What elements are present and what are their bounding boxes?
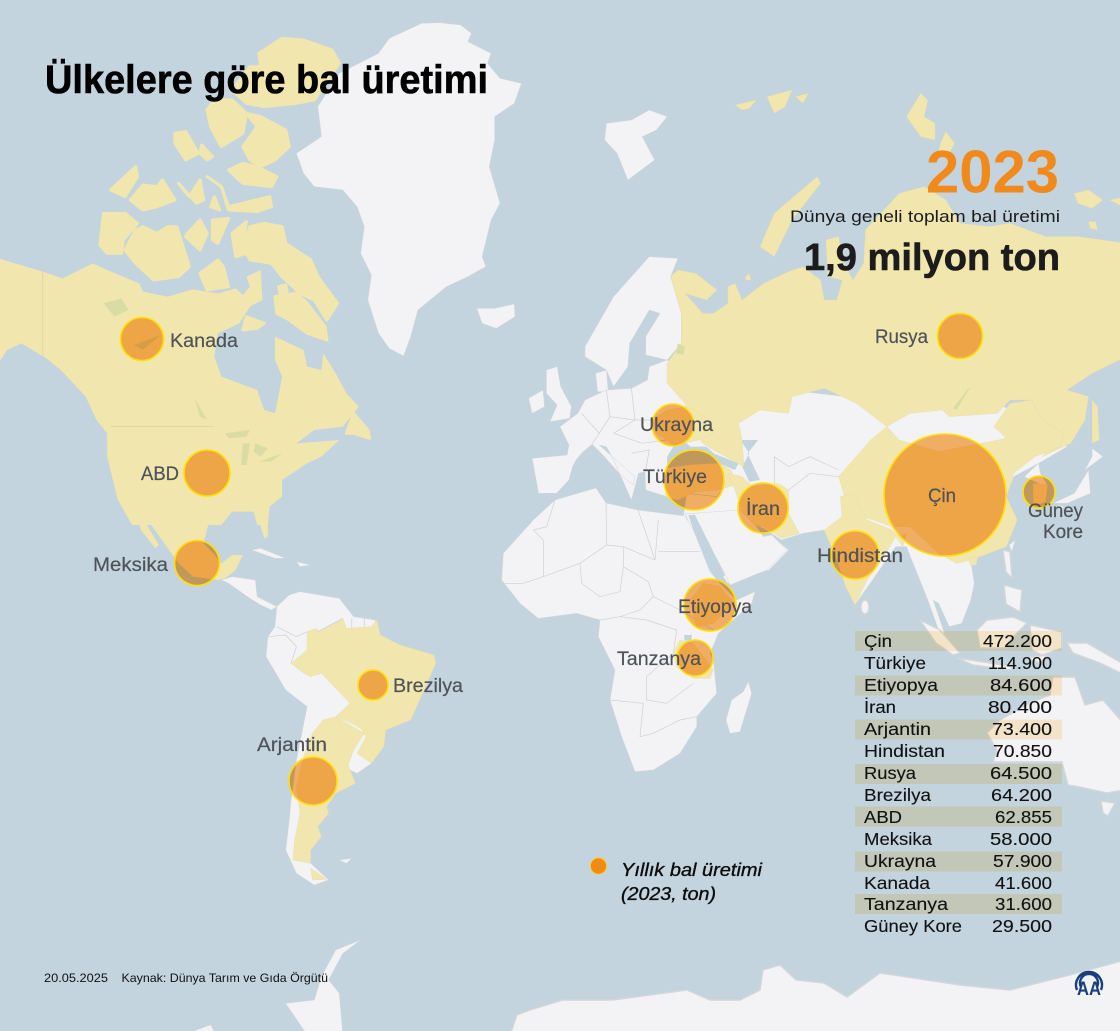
bubble: Etiyopya	[684, 579, 736, 631]
label: Tanzanya: Tanzanya	[617, 649, 701, 670]
land: Madagascar	[726, 682, 752, 733]
bubble: Arjantin	[289, 757, 337, 805]
label: Etiyopya: Etiyopya	[678, 597, 752, 618]
label: Ukrayna: Ukrayna	[640, 415, 713, 436]
land: Caribbean islands	[252, 548, 311, 567]
table values: 62.855	[995, 807, 1052, 827]
map: Southeast Asia and Oceania	[920, 550, 1120, 816]
land: Iceland	[477, 304, 515, 328]
land: Philippines	[1003, 550, 1022, 612]
table values	[983, 631, 1052, 936]
land: Central America	[221, 577, 277, 610]
water: Red Sea	[688, 515, 725, 578]
African borders	[503, 500, 713, 737]
borders: Alaska and USA-Canada	[43, 272, 214, 427]
table values: 57.900	[993, 851, 1052, 871]
table values: 80.400	[988, 697, 1052, 717]
table row stripes	[855, 631, 1062, 914]
bubble: Brezilya	[358, 670, 388, 700]
table values: 64.200	[991, 785, 1052, 805]
table values: 29.500	[992, 916, 1052, 936]
table country names: Türkiye	[864, 653, 926, 673]
land: Tanzania	[673, 640, 713, 678]
table values: 114.900	[988, 653, 1052, 673]
title: Ülkelere göre bal üretimi	[45, 57, 488, 102]
land: Korea	[1024, 463, 1047, 485]
water: Lake Victoria	[684, 635, 692, 641]
icon: AA logo	[1076, 972, 1102, 1000]
land: Borneo and Sulawesi	[977, 617, 1062, 655]
legend marker	[590, 858, 607, 874]
land: Sri Lanka	[861, 600, 869, 614]
table country names: Güney Kore	[864, 916, 962, 936]
year: 2023	[926, 138, 1059, 206]
land: Mexico and southern USA	[132, 515, 268, 580]
label: Meksika: Meksika	[93, 555, 168, 576]
South American borders	[268, 617, 364, 663]
land: Canadian Arctic islands	[100, 38, 370, 438]
table country names: Etiyopya	[864, 675, 938, 695]
land: Russian Arctic islands	[735, 90, 1120, 280]
table country names: Arjantin	[864, 719, 931, 739]
land: Japan	[1053, 448, 1103, 513]
land: British Isles	[529, 367, 571, 422]
land: Taiwan	[1009, 540, 1015, 552]
label: Türkiye: Türkiye	[643, 467, 707, 488]
legend text: (2023, ton)	[621, 884, 716, 904]
water: Black Sea	[667, 442, 739, 470]
bubble: Hindistan	[831, 531, 879, 579]
map: Africa	[502, 488, 787, 772]
label: ABD: ABD	[141, 464, 179, 485]
table values: 84.600	[990, 675, 1052, 695]
table country names: Brezilya	[864, 785, 931, 805]
land: Taimyr and northern Siberia	[865, 187, 1120, 333]
table country names: ABD	[864, 807, 902, 827]
land: Turkey	[665, 463, 735, 500]
label: Hindistan: Hindistan	[817, 546, 903, 567]
table country names: Ukrayna	[864, 851, 936, 871]
summary caption: Dünya geneli toplam bal üretimi	[790, 208, 1060, 226]
legend text: Yıllık bal üretimi	[621, 860, 763, 880]
table country names: Tanzanya	[864, 894, 948, 914]
global total: 1,9 milyon ton	[804, 237, 1060, 279]
label: İran: İran	[746, 499, 780, 520]
land: Antarctic peninsula	[182, 940, 564, 1031]
map: north atlantic and north america	[0, 23, 571, 525]
land: Sakhalin	[1092, 400, 1099, 443]
table values: 64.500	[990, 763, 1052, 783]
land: Argentina	[293, 717, 364, 880]
bubble: Rusya	[938, 314, 982, 358]
label: Kanada: Kanada	[170, 331, 238, 352]
table values: 472.200	[983, 631, 1052, 651]
land: Russia	[667, 187, 1120, 467]
table country names: Kanada	[864, 873, 930, 893]
table country names	[864, 631, 962, 936]
label: Brezilya: Brezilya	[393, 676, 463, 697]
lakes of North America	[104, 298, 282, 465]
bubble: Meksika	[174, 540, 220, 586]
label: Rusya: Rusya	[875, 327, 928, 348]
land: Hainan	[969, 557, 978, 565]
bubble: Tanzanya	[677, 640, 713, 676]
land: Ethiopia	[690, 583, 733, 627]
bubble: Güney Kore	[1023, 476, 1055, 508]
table values: 73.400	[992, 719, 1052, 739]
land: Tasmania	[1101, 801, 1115, 816]
land: Arabian south coast	[693, 510, 787, 585]
bubble: ABD	[184, 450, 230, 496]
water: Caspian Sea	[740, 440, 760, 482]
icon: AA logo: AA	[1077, 979, 1101, 1000]
table country names: Meksika	[864, 829, 932, 849]
label: Çin: Çin	[928, 486, 956, 507]
bubble: İran	[738, 483, 788, 533]
legend	[590, 858, 763, 904]
footer: date and source: Kaynak: Dünya Tarım ve Gıda Örgütü	[122, 971, 328, 985]
table country names: İran	[864, 697, 896, 717]
land: Africa	[502, 488, 755, 772]
land: Falkland Islands	[339, 858, 352, 863]
table country names: Çin	[864, 631, 892, 651]
land: Scandinavia	[585, 257, 681, 387]
land: Sumatra and Java	[920, 620, 1013, 670]
table values: 41.600	[995, 873, 1052, 893]
bubble: Kanada	[120, 318, 164, 360]
land: Arabian peninsula	[685, 513, 789, 583]
label: Güney Kore: Güney	[1028, 501, 1083, 522]
land: Timor and New Guinea	[1027, 643, 1120, 675]
table country names: Hindistan	[864, 741, 945, 761]
footer: date and source: 20.05.2025	[44, 971, 108, 985]
land: Greenland	[296, 23, 521, 356]
land: India	[824, 493, 906, 605]
land: Europe and Asia	[532, 360, 1067, 635]
map: central and south america	[132, 515, 564, 1031]
water: Persian Gulf	[742, 520, 771, 542]
table country names: Rusya	[864, 763, 916, 783]
table values: 58.000	[990, 829, 1052, 849]
land: Svalbard	[605, 110, 667, 180]
land: Brazil	[291, 618, 436, 763]
land: Ukraine	[653, 407, 714, 445]
bubble: Çin	[884, 434, 1006, 556]
land: South America	[266, 592, 436, 885]
label: Güney Kore: Kore	[1043, 522, 1083, 543]
map: Eurasia	[532, 90, 1120, 635]
table values: 70.850	[993, 741, 1052, 761]
label: Arjantin: Arjantin	[257, 735, 327, 756]
land: North America mainland	[0, 258, 359, 525]
bubble: Ukrayna	[652, 404, 694, 446]
lakes: Ladoga and Baikal	[676, 343, 971, 410]
European and Central Asian borders	[581, 388, 839, 513]
land: Australia	[987, 677, 1120, 793]
summary block	[790, 138, 1060, 279]
land: Iran	[728, 473, 799, 538]
ranking table	[855, 631, 1062, 936]
land: Antarctica	[510, 960, 1120, 1031]
land: Denmark	[596, 370, 608, 392]
land: Yamal peninsula	[826, 237, 842, 280]
bubble: Türkiye	[664, 450, 724, 510]
land: China	[839, 400, 1064, 563]
land: South Korea	[1033, 483, 1047, 507]
table values: 31.600	[995, 894, 1052, 914]
